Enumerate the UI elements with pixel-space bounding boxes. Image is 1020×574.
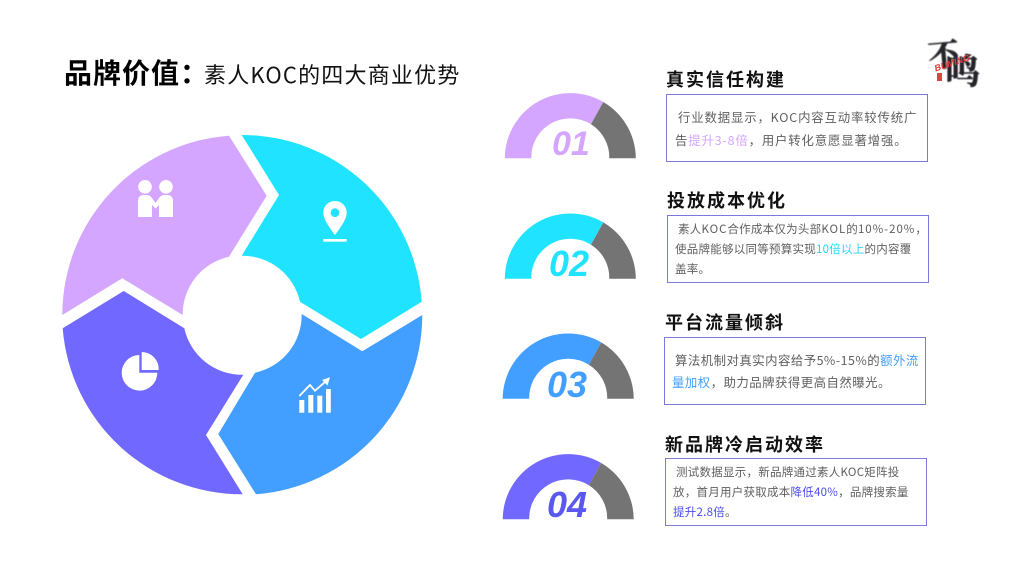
segment: blue	[218, 314, 422, 494]
heading 2: 投放成本优化	[667, 187, 787, 213]
number 01: 01	[552, 125, 590, 163]
text box 2: 使品牌能够以同等预算实现10倍以上的内容覆	[675, 241, 912, 257]
heading 4: 新品牌冷启动效率	[665, 431, 825, 457]
text box 1: 行业数据显示，KOC内容互动率较传统广	[678, 108, 917, 126]
gauge 04	[503, 454, 634, 519]
text box 4: 测试数据显示，新品牌通过素人KOC矩阵投	[676, 464, 900, 480]
logo	[926, 29, 980, 95]
number 02: 02	[549, 243, 589, 284]
text box 4	[665, 458, 927, 526]
logo seal	[937, 73, 942, 81]
icon: pie chart	[122, 352, 159, 391]
text box 4: 提升2.8倍。	[673, 504, 737, 520]
text box 2	[667, 215, 929, 283]
icon: people	[138, 180, 173, 217]
text box 3	[664, 337, 926, 405]
heading 1: 真实信任构建	[666, 66, 786, 92]
text box 3: 量加权，助力品牌获得更高自然曝光。	[672, 373, 891, 391]
title sub: 素人KOC的四大商业优势	[204, 58, 460, 90]
text box 4: 放，首月用户获取成本降低40%，品牌搜索量	[673, 484, 909, 500]
segment: purple	[63, 291, 243, 494]
number 04: 04	[547, 484, 587, 525]
gauge 02	[505, 213, 636, 279]
title	[64, 52, 460, 92]
text box 1: 告提升3-8倍，用户转化意愿显著增强。	[675, 131, 907, 149]
icon: rising bar chart	[299, 377, 331, 413]
gauge 01	[505, 93, 636, 158]
logo character 鸣: 鸣	[945, 45, 980, 95]
gauge 03	[503, 333, 634, 399]
text box 2: 素人KOC合作成本仅为头部KOL的10%-20%，	[678, 221, 927, 237]
segment: cyan	[242, 135, 422, 339]
text box 2: 盖率。	[675, 261, 710, 277]
text box 3: 算法机制对真实内容给予5%-15%的额外流	[675, 351, 919, 369]
logo character 不: 不	[926, 29, 961, 76]
text box 1	[666, 94, 928, 162]
icon: map pin	[323, 201, 347, 242]
segment: lilac	[62, 136, 267, 315]
title main: 品牌价值：	[64, 52, 209, 92]
heading 3: 平台流量倾斜	[665, 309, 785, 335]
number 03: 03	[547, 364, 587, 405]
logo latin name: BUMING	[933, 53, 971, 73]
